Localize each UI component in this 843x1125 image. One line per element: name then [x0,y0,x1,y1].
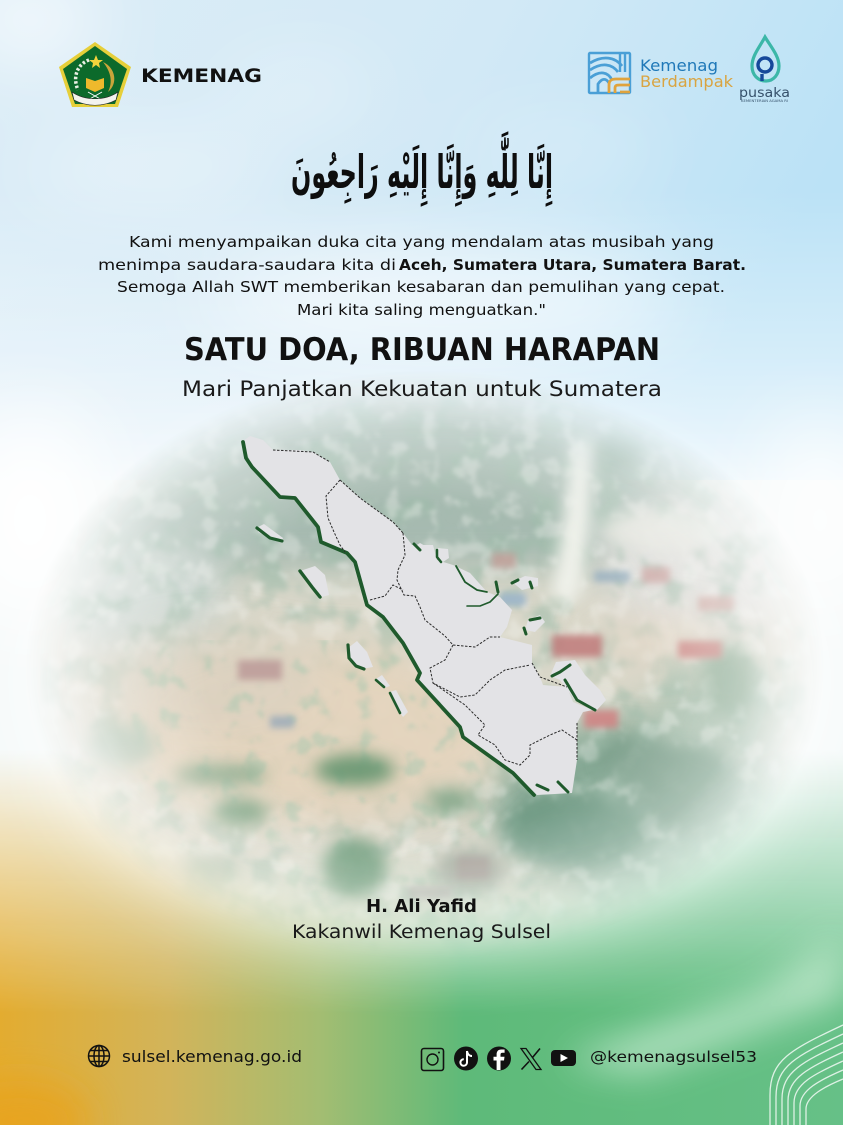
icon: Instagram [422,1048,444,1070]
icon: TikTok [454,1046,478,1070]
social media [422,1046,757,1070]
decorative contour lines [770,1025,843,1125]
text: Kemenag Berdampak [640,56,734,91]
text: social handle: @kemenagsulsel53 [590,1048,757,1066]
Arabic calligraphy: إِنَّا لِلَّٰهِ وَإِنَّا إِلَيْهِ رَاجِعُونَ [291,130,553,207]
gradient ground: orange to green [0,750,843,1125]
text: website address: sulsel.kemenag.go.id [122,1047,302,1066]
Kemenag logo [59,42,262,107]
condolence message: Aceh, Sumatera Utara, Sumatera Barat. [399,256,746,274]
signatory [292,896,551,943]
condolence message [98,233,746,319]
flood vegetation speckle [120,640,540,940]
main heading: SATU DOA, RIBUAN HARAPAN [184,332,660,368]
map: mainland provinces [243,436,593,795]
map: dark green west coast [243,442,595,795]
condolence message: Kami menyampaikan duka cita yang mendalam atas musibah yang [129,233,714,251]
text: pusaka: KEMENTERIAN AGAMA RI [741,99,788,103]
icon: Kemenag Berdampak mark [589,53,630,93]
partner logos [589,37,790,103]
icon: YouTube [551,1050,576,1066]
tree-canopy texture [64,506,784,922]
signatory: Kakanwil Kemenag Sulsel [292,922,551,943]
map: Nias, Simeulue and Mentawai islands [258,524,545,717]
condolence message: menimpa saudara-saudara kita di [98,256,396,274]
icon: Kemenag pentagon emblem [59,42,131,107]
map of Sumatra [243,436,606,795]
logo wordmark: KEMENAG [141,65,262,87]
signatory: H. Ali Yafid [366,896,477,917]
text: Kemenag Berdampak: Kemenag [640,56,718,75]
condolence message: Mari kita saling menguatkan." [297,301,546,319]
icon: Facebook [487,1046,511,1070]
blurred flood photograph [42,382,806,929]
icon: globe [88,1046,110,1066]
map: province borders [273,450,577,765]
subheading: Mari Panjatkan Kekuatan untuk Sumatera [182,377,662,401]
icon: X [521,1048,541,1070]
text: pusaka: pusaka [739,86,790,101]
text: Kemenag Berdampak: Berdampak [640,72,734,91]
white glow behind photo [40,425,820,935]
condolence message: Semoga Allah SWT memberikan kesabaran dan pemulihan yang cepat. [117,278,725,296]
website [88,1046,302,1066]
icon: Pusaka water drop [752,37,779,81]
map: Bangka Belitung land [550,660,606,710]
